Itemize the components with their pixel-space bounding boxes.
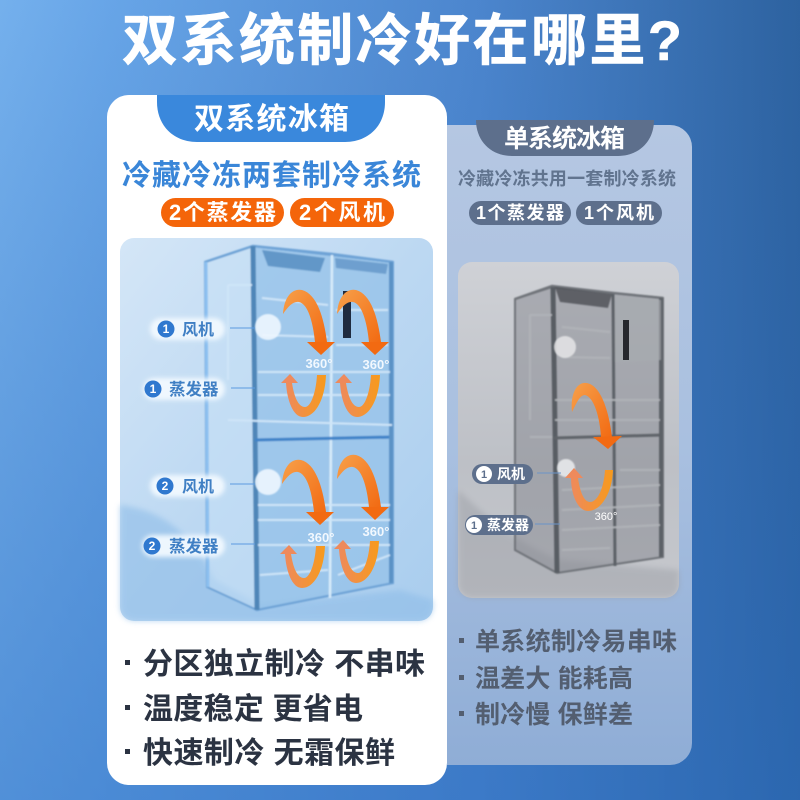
left lower fan icon bbox=[255, 469, 281, 495]
360 degree labels: 360° bbox=[306, 356, 332, 371]
right bullet list: 温差大 能耗高 bbox=[475, 665, 633, 693]
left subtitle: 冷藏冷冻两套制冷系统 bbox=[122, 159, 421, 192]
left bullet list: 快速制冷 无霜保鲜 bbox=[143, 737, 395, 770]
right pills bbox=[469, 201, 662, 225]
right label: fan bbox=[472, 464, 533, 484]
right 360 label: 360° bbox=[595, 511, 617, 523]
right label: evaporator: 蒸发器 bbox=[487, 517, 529, 533]
arrow: lower left down bbox=[282, 460, 334, 525]
arrow: upper right up bbox=[335, 374, 380, 417]
360 degree labels: 360° bbox=[363, 524, 389, 539]
left fan icon bbox=[255, 314, 281, 340]
arrow: upper left down bbox=[283, 290, 335, 355]
label: evaporator 1: 1 bbox=[150, 382, 157, 396]
label: fan 2: 风机 bbox=[182, 478, 214, 496]
left fridge display bbox=[343, 291, 351, 338]
label: evaporator 2 bbox=[142, 535, 225, 557]
right header tab: 单系统冰箱 bbox=[504, 125, 625, 153]
right label: evaporator: 1 bbox=[471, 520, 477, 532]
arrow: upper left up bbox=[281, 374, 326, 417]
arrow: upper right down bbox=[337, 290, 389, 355]
arrow: lower right down bbox=[337, 455, 389, 520]
right arrow up bbox=[565, 468, 613, 511]
right lower fan icon bbox=[557, 459, 575, 477]
right bullet list bbox=[459, 628, 677, 729]
360 degree labels: 360° bbox=[363, 357, 389, 372]
right subtitle: 冷藏冷冻共用一套制冷系统 bbox=[458, 168, 676, 189]
right arrow down bbox=[572, 383, 622, 449]
right fridge body bbox=[515, 286, 663, 573]
label: fan 1: 1 bbox=[163, 322, 170, 336]
label: fan 1: 风机 bbox=[182, 321, 214, 339]
left bullet list bbox=[125, 648, 425, 770]
left header tab: 双系统冰箱 bbox=[194, 103, 349, 136]
label: evaporator 2: 2 bbox=[149, 539, 156, 553]
right photo panel bbox=[458, 262, 679, 598]
right label: fan: 1 bbox=[481, 469, 487, 481]
label: evaporator 1 bbox=[143, 378, 225, 400]
label: evaporator 2: 蒸发器 bbox=[169, 536, 219, 556]
right fan icon bbox=[554, 336, 576, 358]
right label: evaporator bbox=[465, 515, 533, 535]
left card background bbox=[107, 95, 447, 785]
right bullet list: 单系统制冷易串味 bbox=[475, 628, 677, 656]
left bullet list: 分区独立制冷 不串味 bbox=[143, 648, 425, 681]
left pills: 2个蒸发器 bbox=[169, 200, 276, 225]
label: fan 1 bbox=[150, 318, 225, 340]
right header tab bbox=[476, 120, 654, 156]
left pills bbox=[161, 198, 394, 227]
left bullet list: 温度稳定 更省电 bbox=[143, 693, 363, 726]
360 degree labels bbox=[306, 356, 389, 545]
left photo panel bbox=[120, 238, 433, 621]
panel: dual-system fridge bbox=[107, 95, 447, 785]
right card background bbox=[447, 125, 692, 765]
label: evaporator 1: 蒸发器 bbox=[169, 379, 219, 399]
arrow: lower left up bbox=[280, 545, 325, 588]
right fridge display bbox=[623, 320, 629, 360]
label: fan 2: 2 bbox=[162, 479, 169, 493]
left fridge body bbox=[205, 246, 393, 610]
arrow: lower right up bbox=[334, 540, 379, 583]
label: fan 2 bbox=[150, 475, 225, 497]
left label lines bbox=[230, 328, 255, 544]
360 degree labels: 360° bbox=[308, 530, 334, 545]
right bullet list: 制冷慢 保鲜差 bbox=[475, 701, 633, 729]
left pills: 2个风机 bbox=[299, 200, 385, 225]
panel: single-system fridge bbox=[447, 120, 692, 765]
left header tab bbox=[157, 95, 385, 142]
right pills: 1个蒸发器 bbox=[476, 202, 564, 223]
right pills: 1个风机 bbox=[584, 203, 654, 223]
title: 双系统制冷好在哪里? bbox=[122, 9, 682, 72]
right label lines bbox=[535, 473, 561, 524]
right label: fan: 风机 bbox=[497, 466, 525, 482]
